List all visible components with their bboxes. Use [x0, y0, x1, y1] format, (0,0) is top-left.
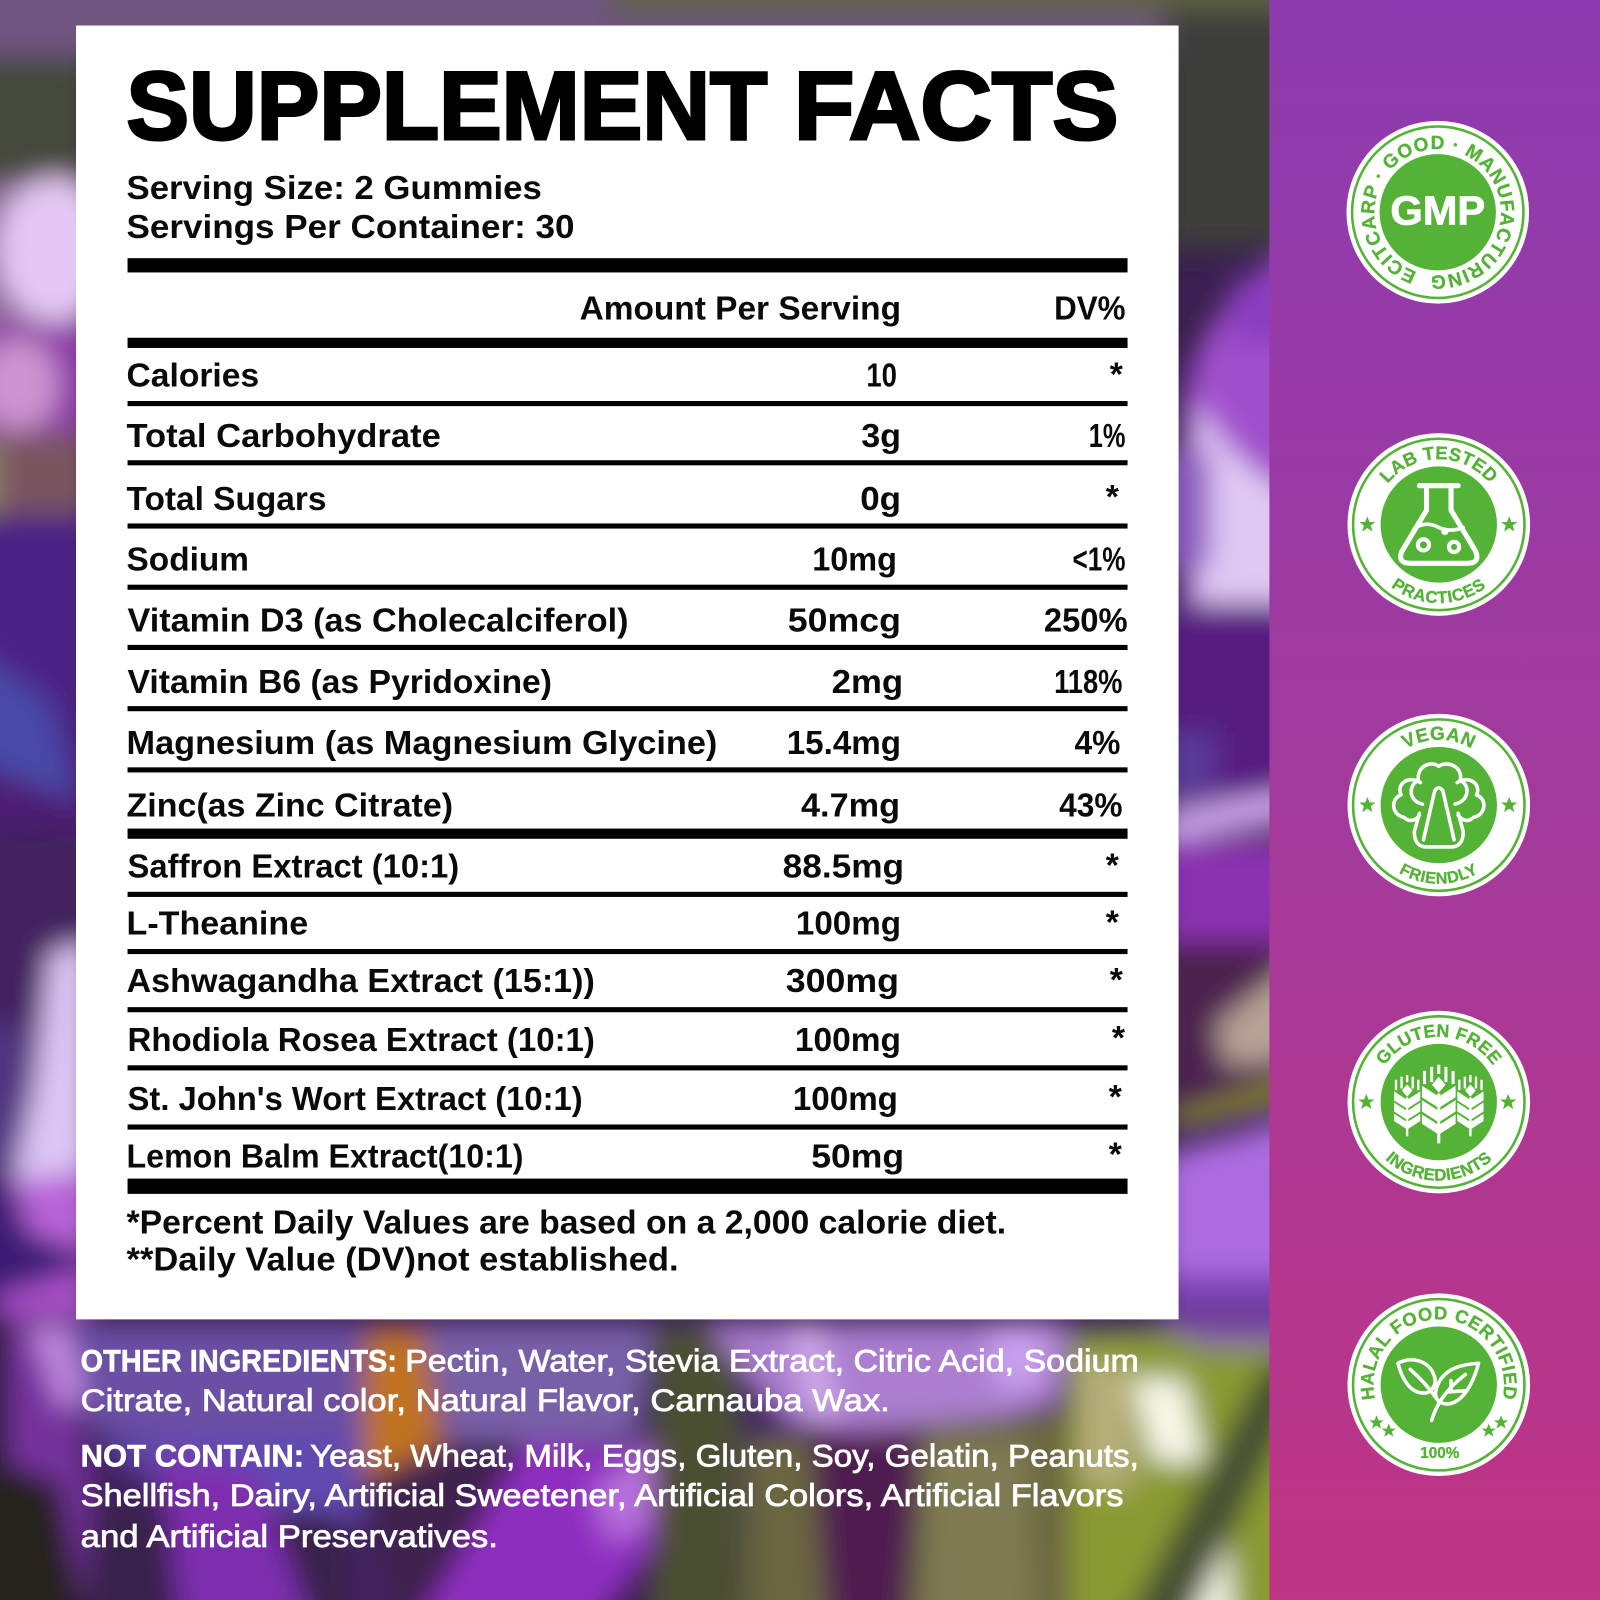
row: rhodiola rosea extract — [128, 1020, 1126, 1059]
row: lemon balm extract: * — [1109, 1136, 1123, 1173]
row: total sugars: 0g — [860, 481, 901, 518]
badge: halal food certified: HALAL FOOD CERTIFIED — [1360, 1306, 1517, 1400]
row: zinc — [127, 787, 1123, 824]
not contain text: NOT CONTAIN: — [81, 1437, 304, 1473]
row: magnesium: 15.4mg — [787, 725, 901, 762]
row: saffron extract: Saffron Extract (10:1) — [128, 849, 459, 886]
row: vitamin D3: 250% — [1044, 603, 1128, 640]
icon: leaves — [1398, 1360, 1479, 1420]
row: ashwagandha extract: * — [1110, 962, 1124, 999]
row: total carbohydrate: 1% — [1089, 418, 1126, 455]
row: vitamin D3 — [128, 603, 1128, 640]
icon: broccoli — [1394, 764, 1484, 847]
row: st. john's wort extract: St. John's Wort Extract (10:1) — [128, 1081, 583, 1118]
row: ashwagandha extract: 300mg — [786, 963, 899, 1000]
table header: DV% — [1054, 290, 1126, 327]
icon: flask — [1401, 486, 1477, 563]
other ingredients text — [81, 1342, 1139, 1418]
row: l-theanine — [127, 905, 1120, 943]
footnotes — [127, 1205, 1006, 1278]
row: vitamin D3: Vitamin D3 (as Cholecalciferol) — [128, 603, 629, 640]
row: total carbohydrate — [127, 418, 1126, 455]
title — [127, 51, 1118, 160]
not contain text: Yeast, Wheat, Milk, Eggs, Gluten, Soy, Gelatin, Peanuts, — [310, 1437, 1139, 1473]
icon: wheat stalks — [1394, 1065, 1483, 1143]
row: l-theanine: 100mg — [796, 906, 901, 943]
serving information: Serving Size: 2 Gummies — [127, 170, 542, 207]
right purple-to-magenta column — [1269, 0, 1600, 1600]
row: saffron extract: * — [1106, 848, 1120, 885]
row: st. john's wort extract — [128, 1079, 1123, 1118]
row: calories: * — [1110, 357, 1124, 394]
row: vitamin B6: 2mg — [832, 664, 903, 701]
row: st. john's wort extract: * — [1109, 1079, 1123, 1116]
row: rhodiola rosea extract: * — [1112, 1020, 1126, 1057]
row: ashwagandha extract: Ashwagandha Extract (15:1)) — [127, 963, 595, 1000]
row: lemon balm extract — [127, 1136, 1123, 1175]
table header: Amount Per Serving — [580, 290, 901, 327]
row: l-theanine: L-Theanine — [127, 906, 308, 943]
panel: supplement facts label — [76, 26, 1179, 1319]
other ingredients text: Pectin, Water, Stevia Extract, Citric Acid, Sodium — [405, 1342, 1139, 1378]
row: total sugars: * — [1106, 479, 1120, 516]
row: lemon balm extract: Lemon Balm Extract(10:1) — [127, 1138, 523, 1175]
badge: GMP good manufacturing practice: ECITCARP · GOOD · MANUFACTURING — [1361, 136, 1514, 289]
row: l-theanine: * — [1106, 905, 1120, 942]
row: total carbohydrate: Total Carbohydrate — [127, 418, 441, 455]
serving information: Servings Per Container: 30 — [127, 209, 574, 246]
row: lemon balm extract: 50mg — [811, 1138, 904, 1175]
row: sodium — [127, 541, 1126, 578]
row: sodium: <1% — [1072, 541, 1126, 578]
row: magnesium: Magnesium (as Magnesium Glycine) — [127, 725, 717, 762]
row: saffron extract: 88.5mg — [783, 849, 904, 886]
row: total sugars — [127, 479, 1120, 518]
row: calories: Calories — [127, 358, 259, 395]
stars — [1369, 1415, 1508, 1437]
badge: vegan friendly: FRIENDLY — [1399, 862, 1475, 884]
row: st. john's wort extract: 100mg — [793, 1081, 898, 1118]
row: zinc: 43% — [1059, 787, 1123, 824]
badge: lab tested practices: PRACTICES — [1392, 578, 1485, 604]
row: rhodiola rosea extract: Rhodiola Rosea Extract (10:1) — [128, 1022, 595, 1059]
row: calories: 10 — [866, 358, 897, 395]
row: calories — [127, 357, 1124, 395]
serving information — [127, 170, 574, 246]
badge: vegan friendly: VEGAN — [1400, 726, 1476, 748]
row: total carbohydrate: 3g — [861, 418, 901, 455]
footnotes: *Percent Daily Values are based on a 2,000 calorie diet. — [127, 1205, 1006, 1242]
row: sodium: Sodium — [127, 541, 249, 578]
table rules — [128, 258, 1128, 1194]
row: zinc: Zinc(as Zinc Citrate) — [127, 787, 453, 824]
row: vitamin B6: 118% — [1054, 664, 1122, 701]
not contain text: and Artificial Preservatives. — [81, 1518, 498, 1554]
not contain text — [81, 1437, 1139, 1554]
other ingredients text: Citrate, Natural color, Natural Flavor, Carnauba Wax. — [81, 1382, 890, 1418]
row: vitamin D3: 50mcg — [788, 603, 901, 640]
row: ashwagandha extract — [127, 962, 1124, 1000]
badge: gluten free ingredients: GLUTEN FREE — [1377, 1024, 1502, 1066]
row: magnesium: 4% — [1074, 725, 1120, 762]
row: sodium: 10mg — [812, 541, 897, 578]
badge: lab tested practices: LAB TESTED — [1379, 446, 1496, 484]
table header — [580, 290, 1126, 327]
footnotes: **Daily Value (DV)not established. — [127, 1241, 679, 1278]
title: SUPPLEMENT — [127, 51, 767, 160]
badge: gluten free ingredients — [1347, 1010, 1530, 1194]
badge: GMP good manufacturing practice: GMP — [1390, 187, 1485, 233]
badge: gluten free ingredients: INGREDIENTS — [1386, 1151, 1491, 1181]
row: zinc: 4.7mg — [801, 787, 900, 824]
row: total sugars: Total Sugars — [127, 481, 327, 518]
title: FACTS — [794, 51, 1118, 160]
row: magnesium — [127, 725, 1120, 762]
not contain text: Shellfish, Dairy, Artificial Sweetener, Artificial Colors, Artificial Flavors — [81, 1477, 1123, 1513]
badge: vegan friendly — [1347, 714, 1530, 896]
badge: halal food certified: 100% — [1420, 1445, 1460, 1462]
row: vitamin B6 — [128, 664, 1122, 701]
row: rhodiola rosea extract: 100mg — [795, 1022, 901, 1059]
row: vitamin B6: Vitamin B6 (as Pyridoxine) — [128, 664, 552, 701]
other ingredients text: OTHER INGREDIENTS: — [81, 1342, 397, 1378]
row: saffron extract — [128, 848, 1120, 886]
bottom band — [0, 1316, 1330, 1600]
badge: lab tested practices — [1347, 433, 1530, 616]
badge: halal food certified — [1347, 1293, 1530, 1476]
